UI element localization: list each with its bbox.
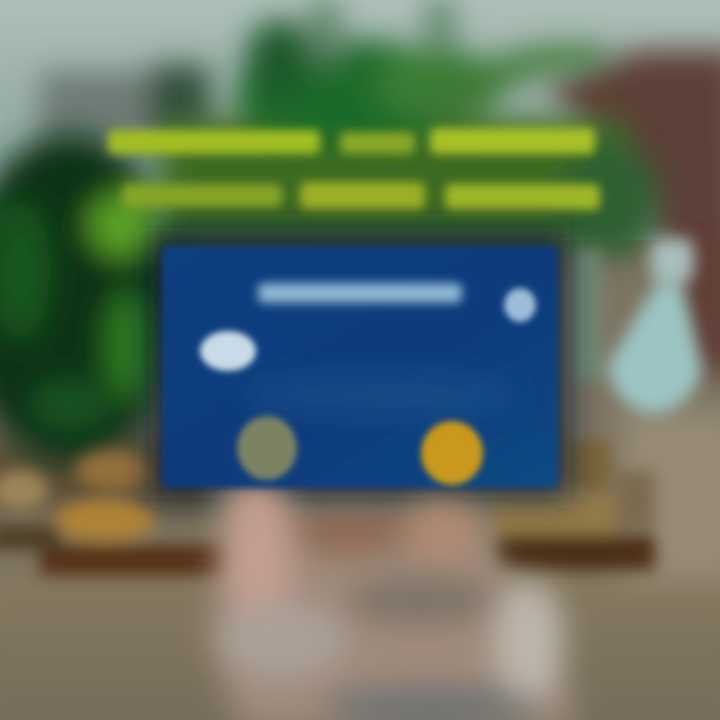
blue credit card: [162, 246, 558, 488]
card top right emblem: [504, 288, 536, 322]
shelf with gold items, right: [490, 440, 655, 570]
upper plant foliage: [160, 0, 660, 260]
thumb coin: [237, 416, 297, 480]
left plant foliage: [0, 135, 180, 465]
table surface: [0, 410, 720, 720]
hand holding the card: [210, 480, 575, 720]
blurred yellow-green headline bars: [108, 128, 600, 210]
gold coin: [421, 421, 483, 485]
card body: [162, 246, 558, 488]
blurred card title: [258, 283, 462, 303]
building at upper left: [40, 65, 210, 152]
card light sheen: [240, 373, 520, 417]
card left logo: [200, 331, 256, 371]
shelf with gold items, left: [0, 450, 230, 575]
glass flask at right: [572, 238, 702, 414]
brown wall at right: [545, 50, 720, 390]
dark shadow around card: [150, 228, 570, 498]
